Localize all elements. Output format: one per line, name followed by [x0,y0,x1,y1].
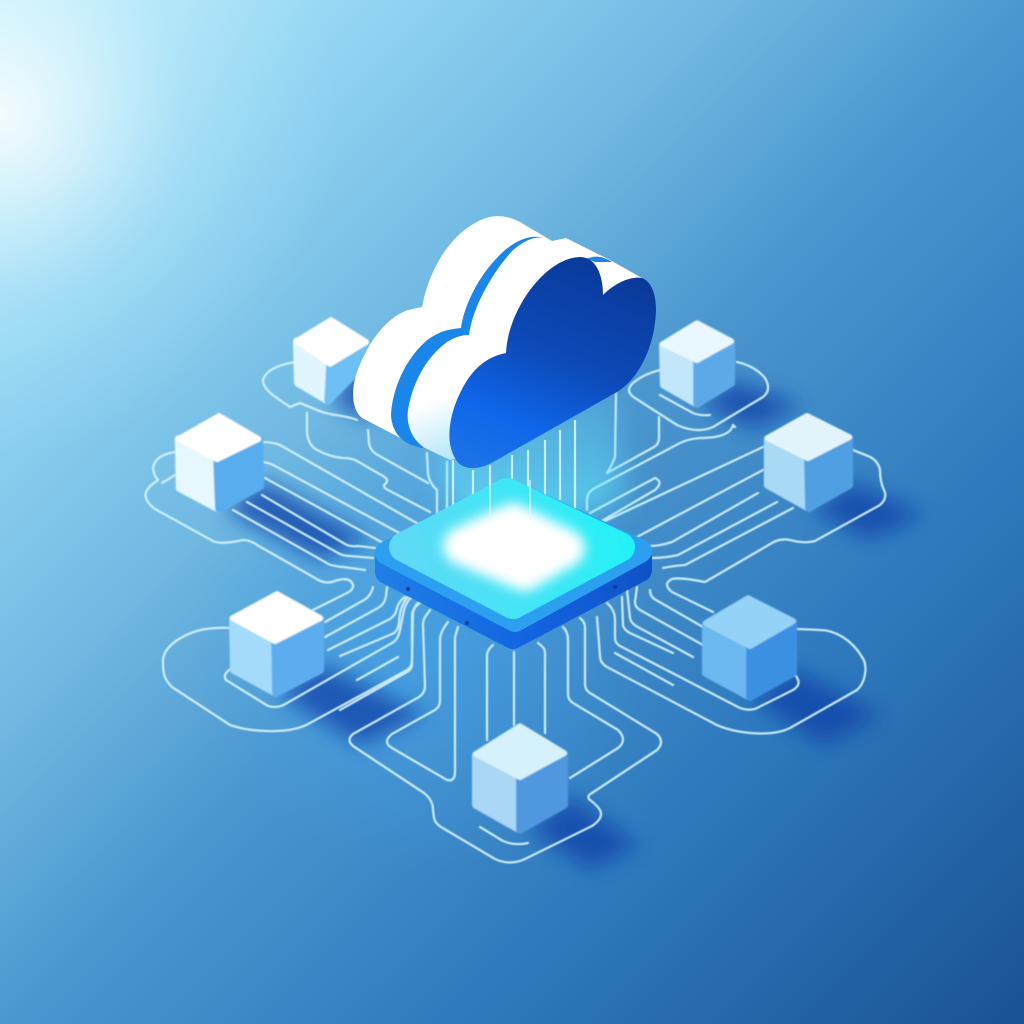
traces: cube upper-left [263,362,447,513]
traces: cube bottom [340,603,661,862]
chip ports [406,585,617,625]
cloud blue stripe [391,237,560,448]
chip top face [404,493,620,604]
cube: left [179,416,260,509]
traces: cube lower-right [597,450,885,733]
circuit traces [146,362,885,862]
traces: cube right [587,425,793,568]
chip glow [462,522,566,572]
traces: cube upper-right [607,362,768,473]
cube: upper left [297,320,366,401]
light beam between cloud and chip [430,392,625,530]
chip middle layer [387,490,640,620]
cloud front slab [408,238,645,460]
cube: lower right [706,598,793,697]
chip base [387,490,640,637]
traces: cube lower-left [163,587,418,731]
cloud front face [449,257,656,468]
cube: bottom [476,726,564,830]
cube shadows [225,362,925,870]
central chip [387,480,640,637]
cube: lower left [233,594,320,693]
cube: upper right [663,323,731,404]
beams over chip [490,480,530,520]
cloud [353,216,656,468]
cube: right [768,416,849,508]
cloud back slab [353,216,642,447]
traces: cube left [146,442,420,610]
